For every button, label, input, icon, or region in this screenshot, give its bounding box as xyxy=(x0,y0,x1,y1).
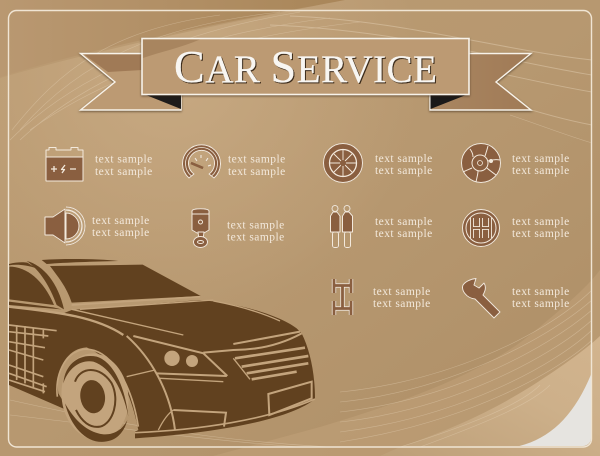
icon: horn xyxy=(45,207,85,245)
text sample: text sample xyxy=(95,154,153,166)
text sample: text sample xyxy=(375,216,433,228)
text sample: text sample xyxy=(373,286,431,298)
text sample: text sample xyxy=(375,153,433,165)
text sample: text sample xyxy=(512,165,570,177)
text sample: text sample xyxy=(512,216,570,228)
car illustration xyxy=(9,259,315,444)
banner: right tail xyxy=(430,54,531,110)
icon: battery xyxy=(46,148,83,181)
text sample: text sample xyxy=(373,298,431,310)
icon: shock absorbers xyxy=(330,206,352,248)
car: roof sliver xyxy=(42,259,118,264)
text sample: text sample xyxy=(95,166,153,178)
car: body xyxy=(9,300,315,438)
car: body lines xyxy=(9,297,315,433)
icon: piston xyxy=(192,209,209,248)
banner: main xyxy=(142,38,469,94)
text sample: text sample xyxy=(512,286,570,298)
banner: left tail xyxy=(80,54,181,110)
text sample: text sample xyxy=(375,165,433,177)
text sample: text sample xyxy=(92,215,150,227)
car: wheel xyxy=(56,349,138,444)
icon: speedometer xyxy=(182,145,220,178)
car: windshield xyxy=(50,265,201,303)
icon: wheel xyxy=(324,144,362,182)
icon: wrench xyxy=(463,278,500,318)
icon: brake disc xyxy=(462,144,500,182)
text sample: text sample xyxy=(512,298,570,310)
text sample: text sample xyxy=(227,220,285,232)
car: headlights xyxy=(164,351,198,367)
icon: gear shifter xyxy=(462,210,500,246)
icon: chassis xyxy=(334,279,351,315)
text sample: text sample xyxy=(227,232,285,244)
text sample: text sample xyxy=(512,153,570,165)
text sample: text sample xyxy=(228,154,286,166)
text sample: text sample xyxy=(512,228,570,240)
car: side window and pillars xyxy=(9,261,64,309)
car: door grid xyxy=(9,325,57,393)
text sample: text sample xyxy=(375,228,433,240)
text sample: text sample xyxy=(228,166,286,178)
title: CAR SERVICE xyxy=(174,41,437,92)
text sample: text sample xyxy=(92,227,150,239)
